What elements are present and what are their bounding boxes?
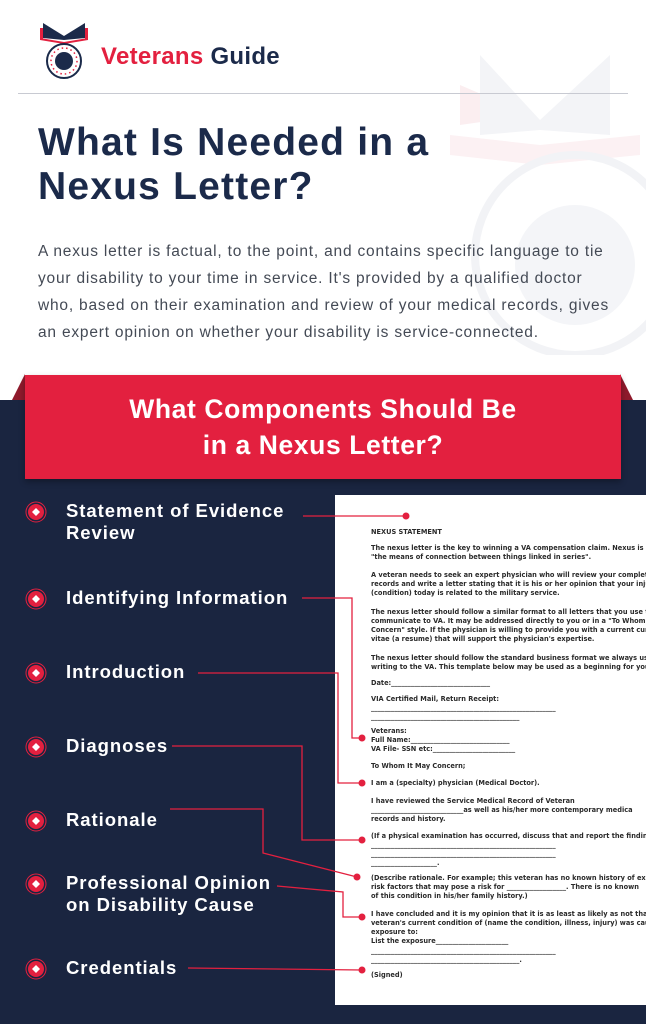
document: nexus letter sample: risk factors that may pose a risk for __________________. There is no known <box>371 883 639 891</box>
item: Credentials <box>26 957 177 980</box>
intro paragraph: A nexus letter is factual, to the point, and contains specific language to tie <box>38 243 604 260</box>
item: Statement of Evidence Review: Review <box>66 522 135 543</box>
document: nexus letter sample: (Signed) <box>371 971 403 979</box>
item: Professional Opinion on Disability Cause <box>26 872 271 915</box>
item: Diagnoses: Diagnoses <box>66 735 168 756</box>
document: nexus letter sample <box>335 495 646 1005</box>
document: nexus letter sample: To Whom It May Concern; <box>371 762 465 770</box>
title: What Is Needed in a <box>38 121 429 164</box>
icon: diamond badge <box>26 502 46 522</box>
document: nexus letter sample: NEXUS STATEMENT <box>371 528 442 536</box>
watermark logo <box>450 56 646 355</box>
banner heading: What Components Should Be <box>129 394 517 424</box>
document: nexus letter sample: of this condition in his/her family history.) <box>371 892 528 900</box>
item: Professional Opinion on Disability Cause: Professional Opinion <box>66 872 271 893</box>
intro paragraph: your disability to your time in service. It's provided by a qualified doctor <box>38 270 582 287</box>
document: nexus letter sample: ________________________________________________________ <box>371 704 556 712</box>
document: nexus letter sample: vitae (a resume) that will support the physician's expertise. <box>371 635 594 643</box>
item: Identifying Information: Identifying Information <box>66 587 288 608</box>
title: Nexus Letter? <box>38 165 314 208</box>
item: Credentials: Credentials <box>66 957 177 978</box>
title <box>38 121 429 208</box>
document: nexus letter sample: _____________________________________________ <box>371 713 519 721</box>
intro paragraph: an expert opinion on whether your disability is service-connected. <box>38 324 539 341</box>
document: nexus letter sample: ____________________________as well as his/her more contemporary medica <box>371 806 633 814</box>
item: Diagnoses <box>26 735 168 758</box>
document: nexus letter sample: I am a (specialty) physician (Medical Doctor). <box>371 779 540 787</box>
document: nexus letter sample: List the exposure______________________ <box>371 937 508 945</box>
item: Professional Opinion on Disability Cause: on Disability Cause <box>66 894 255 915</box>
icon: book and globe <box>40 23 88 79</box>
item: Introduction <box>26 661 185 684</box>
document: nexus letter sample: The nexus letter should follow a similar format to all letters that you use to <box>371 608 646 616</box>
document: nexus letter sample: (condition) today is related to the military service. <box>371 589 560 597</box>
banner heading <box>25 375 621 479</box>
item: Rationale <box>26 809 158 832</box>
logo <box>40 23 280 79</box>
intro paragraph <box>38 243 609 341</box>
document: nexus letter sample: Veterans: <box>371 727 407 735</box>
document: nexus letter sample: Full Name:______________________________ <box>371 736 510 744</box>
item: Rationale: Rationale <box>66 809 158 830</box>
document: nexus letter sample: _____________________________________________. <box>371 956 522 964</box>
banner heading: in a Nexus Letter? <box>203 430 443 460</box>
document: nexus letter sample: exposure to: <box>371 928 418 936</box>
panel: components <box>0 400 646 1024</box>
document: nexus letter sample: ________________________________________________________ <box>371 850 556 858</box>
ribbon folds <box>12 374 633 400</box>
document: nexus letter sample: I have reviewed the Service Medical Record of Veteran <box>371 797 575 805</box>
document: nexus letter sample: ________________________________________________________ <box>371 841 556 849</box>
document: nexus letter sample: records and history. <box>371 815 446 823</box>
document: nexus letter sample: VA File- SSN etc:_________________________ <box>371 745 515 753</box>
document: nexus letter sample: ________________________________________________________ <box>371 947 556 955</box>
item: Introduction: Introduction <box>66 661 185 682</box>
item: Statement of Evidence Review: Statement of Evidence <box>66 500 284 521</box>
document: nexus letter sample: Date:______________________________ <box>371 679 490 687</box>
intro paragraph: who, based on their examination and review of your medical records, gives <box>38 297 609 314</box>
item: Statement of Evidence Review <box>26 500 284 543</box>
brand name: Veterans Guide <box>101 43 280 70</box>
document: nexus letter sample: VIA Certified Mail, Return Receipt: <box>371 695 499 703</box>
document: nexus letter sample: ____________________. <box>371 859 439 867</box>
document: nexus letter sample: "the means of connection between things linked in series". <box>371 553 591 561</box>
